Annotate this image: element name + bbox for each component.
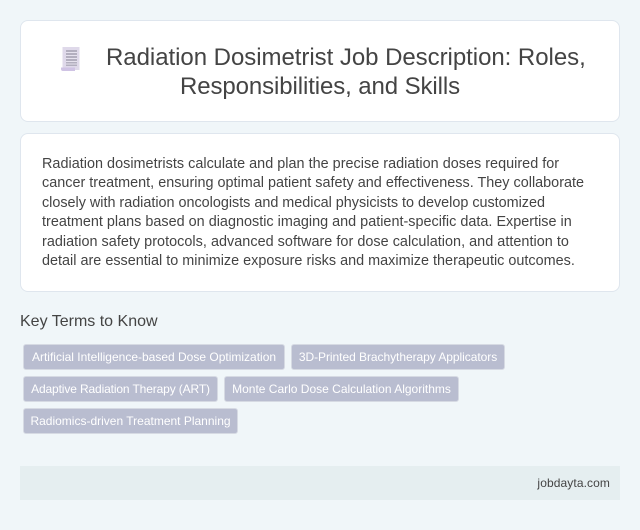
tag: Radiomics-driven Treatment Planning: [30, 414, 231, 428]
tag: 3D-Printed Brachytherapy Applicators: [299, 350, 497, 364]
tag: [224, 376, 459, 402]
title: Radiation Dosimetrist Job Description: Roles,: [106, 44, 586, 71]
heading: key terms: Key Terms to Know: [20, 313, 158, 330]
tag: [23, 408, 238, 434]
footer bar: [20, 466, 620, 500]
title: [106, 44, 586, 100]
description text: treatment plans based on diagnostic imaging and patient-specific data. Expertise in: [42, 214, 572, 230]
description text: closely with radiation oncologists and medical physicists to develop customized: [42, 195, 545, 211]
tag: [23, 344, 285, 370]
tag: Artificial Intelligence-based Dose Optimization: [32, 350, 276, 364]
tag: [23, 376, 218, 402]
description text: detail are essential to minimize exposure risks and maximize therapeutic outcomes.: [42, 253, 575, 269]
description card: [20, 133, 620, 292]
header card: [20, 20, 620, 122]
tag: Monte Carlo Dose Calculation Algorithms: [232, 382, 451, 396]
title: Responsibilities, and Skills: [180, 73, 460, 100]
description text: [42, 156, 584, 269]
tag: [291, 344, 505, 370]
icon: document scroll: [61, 47, 80, 71]
footer source: jobdayta.com: [537, 476, 610, 490]
tag: Adaptive Radiation Therapy (ART): [31, 382, 210, 396]
description text: radiation safety protocols, advanced software for dose calculation, and attention to: [42, 234, 569, 250]
tag list: [23, 344, 505, 434]
description text: Radiation dosimetrists calculate and plan the precise radiation doses required for: [42, 156, 559, 172]
description text: cancer treatment, ensuring optimal patient safety and effectiveness. They collaborate: [42, 175, 584, 191]
